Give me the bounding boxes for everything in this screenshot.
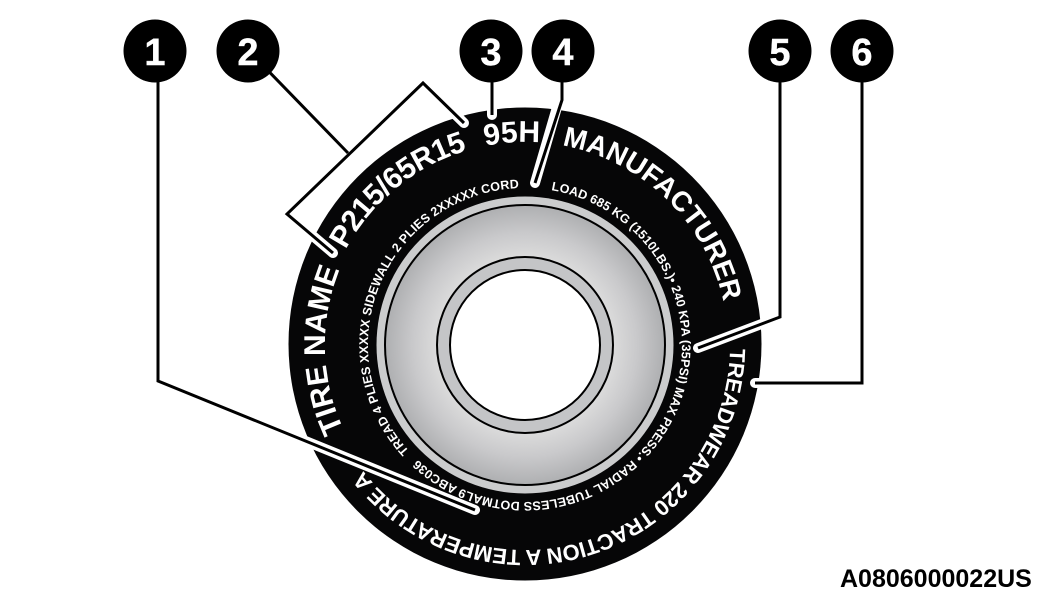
callout badge 1: [124, 20, 186, 82]
inner text: load, pressure, radial, DOT: LOAD 685 KG (1510LBS.)• 240 KPA (35PSI) MAX PRESS.• RADIAL TUBELESS DOTMAL9 ABC036: [413, 182, 691, 511]
leader line 2: [248, 50, 348, 153]
sidewall text: tire name: TIRE NAME: [304, 264, 341, 438]
sidewall text: speed rating: 95H: [484, 121, 538, 145]
wheel hole: [450, 270, 600, 420]
figure code: A0806000022US: [840, 565, 1032, 593]
leader line 6: [755, 50, 862, 383]
callout badge 3: 3: [480, 32, 502, 74]
leader lines: [158, 50, 862, 510]
callout badge 6: [830, 20, 894, 82]
callout badge 5: 5: [769, 32, 791, 74]
callout badge 4: 4: [552, 32, 574, 74]
callout badge 6: 6: [851, 32, 873, 74]
tire sidewall: [288, 108, 762, 580]
wheel face: [385, 205, 665, 485]
tire: [288, 108, 762, 580]
sidewall text: treadwear traction temperature: TREADWEAR 220 TRACTION A TEMPERATURE A: [355, 349, 746, 566]
sidewall text: manufacturer: MANUFACTURER: [564, 126, 740, 302]
callout badge 2: 2: [237, 32, 259, 74]
callout badge 3: [460, 20, 522, 82]
sidewall text: tire size: P215/65R15: [328, 131, 465, 248]
wheel inner ring: [437, 257, 613, 433]
wheel outer rim: [376, 196, 674, 494]
callout badge 5: [748, 20, 812, 82]
leader line halos: [158, 83, 790, 510]
callout badge 4: [532, 20, 594, 82]
leader line 3: [490, 50, 494, 115]
leader line 4: [535, 50, 562, 183]
leader line 5: [698, 50, 780, 348]
leader line 1: [158, 50, 475, 510]
callout badge 1: 1: [144, 32, 166, 74]
callout badge 2: [216, 20, 280, 82]
bracket for tire size: [287, 83, 464, 253]
inner text: plies and cord: TREAD 4 PLIES XXXXX SIDEWALL 2 PLIES 2XXXXX CORD: [359, 180, 518, 457]
